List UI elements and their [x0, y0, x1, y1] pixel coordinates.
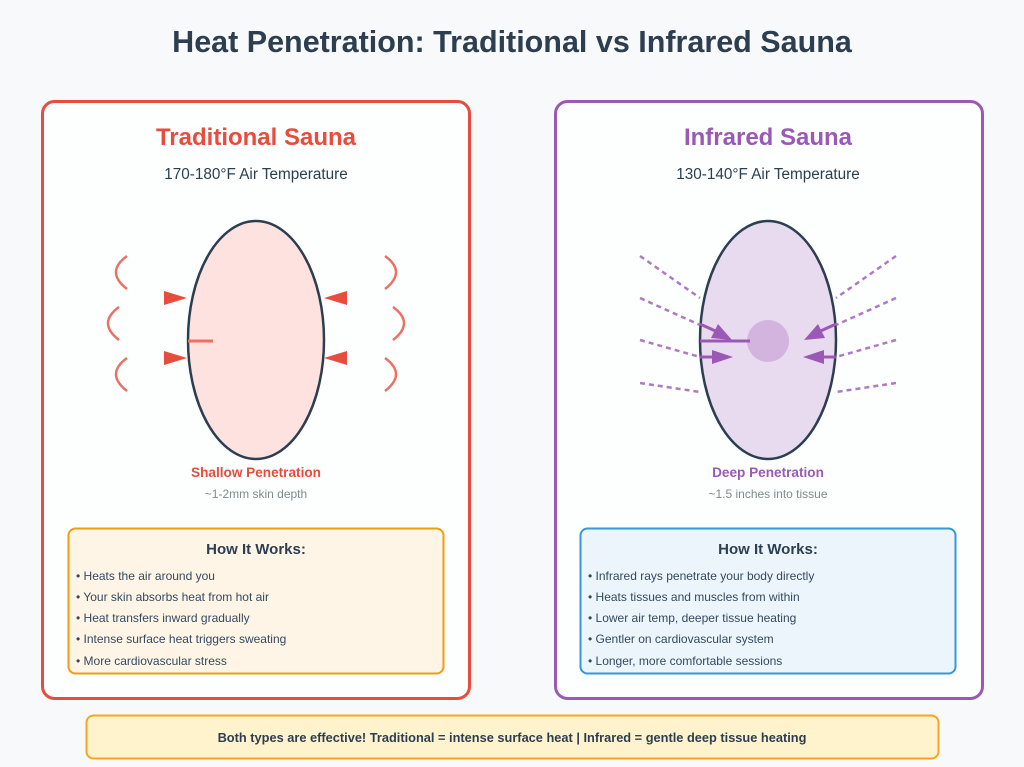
box: how it works infrared: • Lower air temp, deeper tissue heating [588, 611, 796, 625]
box: how it works infrared [580, 528, 956, 674]
panel: traditional sauna [42, 102, 470, 698]
heading: infrared: Infrared Sauna [684, 124, 853, 151]
text: infrared temp: 130-140°F Air Temperature [676, 166, 860, 183]
box: how it works infrared: • Gentler on cardiovascular system [588, 632, 774, 646]
body diagram: traditional [108, 221, 404, 459]
label: shallow penetration: Shallow Penetration [191, 465, 321, 480]
box: how it works infrared: • Heats tissues and muscles from within [588, 590, 800, 604]
box: how it works traditional: How It Works: [206, 541, 306, 558]
title: Heat Penetration: Traditional vs Infrared Sauna [172, 25, 853, 59]
text: tissue depth: ~1.5 inches into tissue [708, 487, 828, 501]
callout: summary: Both types are effective! Traditional = intense surface heat | Infrared = gentle deep tissue heating [218, 730, 806, 745]
box: how it works infrared: How It Works: [718, 541, 818, 558]
box: how it works infrared: • Infrared rays penetrate your body directly [588, 569, 814, 583]
heading: traditional: Traditional Sauna [156, 124, 357, 151]
box: how it works traditional: • Heat transfers inward gradually [76, 611, 250, 625]
text: traditional temp: 170-180°F Air Temperature [164, 166, 348, 183]
body diagram: infrared [640, 221, 896, 459]
box: how it works traditional [68, 528, 444, 674]
box: how it works traditional: • More cardiovascular stress [76, 654, 227, 668]
box: how it works traditional: • Intense surface heat triggers sweating [76, 632, 286, 646]
panel: infrared sauna [556, 102, 982, 698]
box: how it works traditional: • Your skin absorbs heat from hot air [76, 590, 269, 604]
label: deep penetration: Deep Penetration [712, 465, 824, 480]
text: skin depth: ~1-2mm skin depth [205, 487, 307, 501]
callout: summary [86, 716, 938, 758]
box: how it works infrared: • Longer, more comfortable sessions [588, 654, 782, 668]
box: how it works traditional: • Heats the air around you [76, 569, 215, 583]
